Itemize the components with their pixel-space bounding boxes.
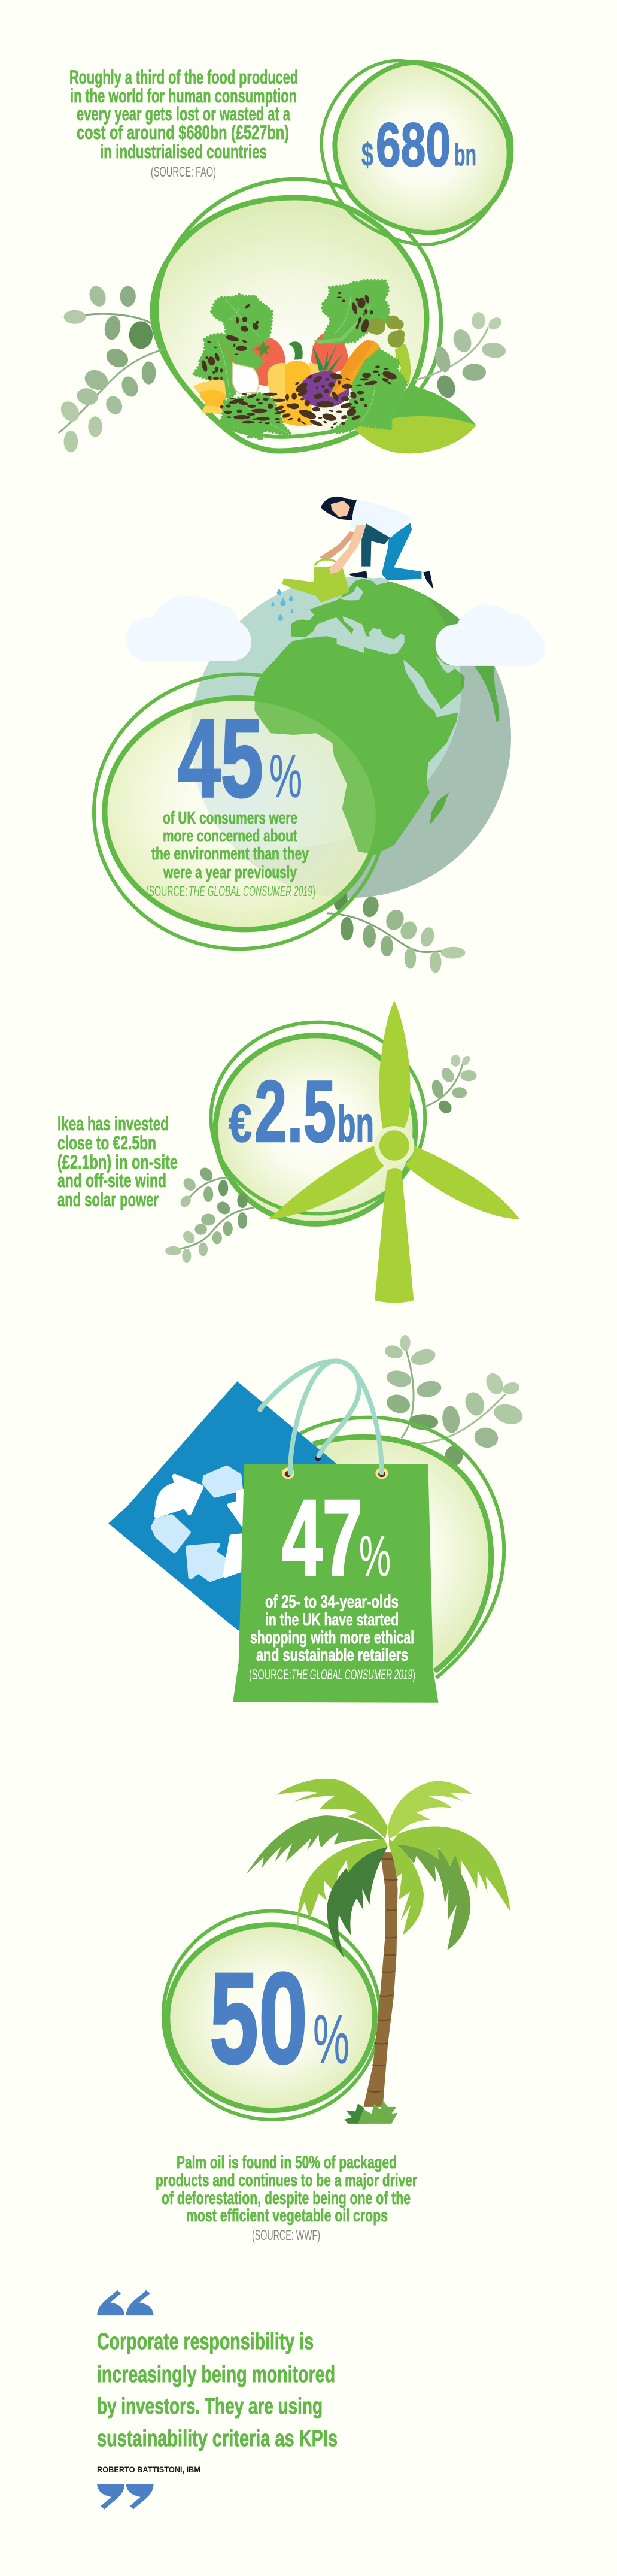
beet (300, 371, 349, 408)
text: UK consumers: were a year previously (163, 863, 297, 882)
cream base (256, 394, 353, 430)
text: Ikea: and solar power (57, 1189, 159, 1210)
intro text: food waste: in industrialised countries (100, 141, 267, 162)
branch: upper left (179, 1167, 229, 1208)
bottom lettuce (220, 349, 407, 439)
branch: top (383, 1335, 443, 1437)
circle: vegetables (153, 179, 441, 451)
beet greens (312, 344, 342, 372)
quote text: increasingly being monitored (97, 2362, 335, 2387)
source: FAO: (SOURCE: FAO) (151, 164, 216, 180)
stat: $680bn: $ (361, 135, 373, 173)
stat: $680bn: 680 (376, 110, 451, 179)
branch: lower left (165, 1193, 253, 1263)
source: The Global Consumer 2019: (SOURCE: (146, 883, 187, 900)
text: palm oil: Palm oil is found in 50% of packaged (177, 2153, 397, 2172)
source: The Global Consumer 2019 (146, 883, 315, 900)
palm artwork (163, 1779, 510, 2124)
land over circle (254, 651, 430, 855)
bag body (233, 1464, 439, 1703)
palm tree (247, 1779, 510, 2124)
onion (217, 335, 235, 362)
brown spoilage spots (200, 292, 398, 429)
carrot (329, 340, 381, 397)
stat: 47%: % (359, 1524, 391, 1588)
text: Ikea: Ikea has invested (57, 1113, 169, 1134)
clouds (126, 595, 546, 666)
text: UK consumers: of UK consumers were (163, 809, 297, 828)
wind turbine (268, 1001, 520, 1303)
source: The Global Consumer 2019: THE GLOBAL CONSUMER 2019 (189, 883, 312, 900)
text: palm oil (156, 2153, 417, 2226)
circle: $680bn (321, 61, 511, 244)
text: palm oil: of deforestation, despite being one of the (162, 2188, 411, 2208)
intro text: food waste: Roughly a third of the food produced (69, 66, 298, 88)
big leaf (352, 385, 476, 453)
recycling tag (108, 1381, 347, 1634)
panel: globe and 45% (81, 497, 546, 973)
text: UK consumers: the environment than they (151, 844, 309, 864)
source: The Global Consumer 2019: ) (312, 883, 315, 900)
quote text: Corporate responsibility is (97, 2329, 314, 2354)
stat: €2.5bn: € (229, 1094, 252, 1153)
text: Ikea (57, 1113, 178, 1210)
branch: upper left (64, 285, 153, 349)
wind artwork (165, 1001, 520, 1303)
panel: quote (97, 2290, 338, 2510)
opening quote mark (97, 2290, 154, 2315)
branch: lower left (58, 346, 163, 452)
panel: food waste (58, 61, 511, 453)
source: WWF: (SOURCE: WWF) (252, 2227, 320, 2244)
broccoli carrot tops (367, 316, 405, 348)
closing quote mark (97, 2484, 154, 2510)
leaves artwork (58, 285, 509, 453)
source: The Global Consumer 2019: ) (412, 1667, 415, 1683)
circle: €2.5bn (211, 1022, 425, 1224)
panel: Ikea wind (57, 1001, 520, 1303)
text: palm oil: most efficient vegetable oil crops (186, 2206, 388, 2226)
stat: €2.5bn: bn (338, 1096, 374, 1152)
stat: 50%: 50 (209, 1945, 308, 2090)
text: Ikea: and off-site wind (57, 1170, 166, 1191)
text: Ikea: (£2.1bn) in on-site (57, 1151, 178, 1173)
globe (190, 577, 511, 898)
intro text: food waste: cost of around $680bn (£527bn) (77, 122, 289, 143)
bag artwork (108, 1335, 526, 1703)
quote text: sustainability criteria as KPIs (97, 2426, 338, 2451)
circle behind bag (290, 1418, 504, 1678)
stat: 45%: % (269, 742, 302, 810)
intro text: food waste: every year gets lost or wasted at a (77, 103, 290, 125)
branch: right (413, 1371, 526, 1469)
stat: €2.5bn: 2.5 (254, 1063, 336, 1160)
stat: 50%: % (313, 2000, 349, 2078)
water drops (271, 588, 294, 621)
pepper (268, 341, 320, 426)
intro text: food waste: in the world for human consumption (70, 85, 297, 107)
text: 25- to 34-year-olds: of 25- to 34-year-olds (265, 1592, 399, 1612)
globe and land (190, 577, 511, 898)
stat: 45%: 45 (178, 697, 263, 821)
intro text: food waste (69, 66, 298, 162)
text: Ikea: close to €2.5bn (57, 1132, 156, 1154)
text: UK consumers (151, 809, 309, 882)
quote attribution: ROBERTO BATTISTONI, IBM (97, 2465, 200, 2474)
text: UK consumers: more concerned about (163, 827, 297, 846)
source: The Global Consumer 2019: THE GLOBAL CONSUMER 2019 (291, 1667, 412, 1683)
source: The Global Consumer 2019: (SOURCE: (249, 1667, 291, 1683)
45% circle (89, 669, 391, 954)
panel: palm oil 50% (156, 1779, 510, 2244)
person watering globe (282, 497, 433, 603)
branch: below globe (327, 889, 466, 973)
stat: 47%: 47 (282, 1478, 363, 1599)
panel: shopping bag 47% (108, 1335, 526, 1703)
tomato stalks (254, 341, 271, 357)
bag handles (257, 1361, 388, 1479)
text: 25- to 34-year-olds: in the UK have started (265, 1610, 399, 1630)
quote text: by investors. They are using (97, 2394, 323, 2419)
seas (291, 578, 460, 717)
squash (193, 380, 226, 414)
stat: $680bn: bn (454, 138, 476, 172)
text: 25- to 34-year-olds: and sustainable retailers (256, 1645, 408, 1665)
lettuce veins (217, 287, 375, 433)
text: 25- to 34-year-olds (250, 1592, 414, 1665)
text: palm oil: products and continues to be a major driver (156, 2171, 417, 2190)
onion bulb (232, 362, 259, 393)
globe artwork (89, 497, 546, 973)
circle: 50% (163, 1911, 380, 2120)
source: The Global Consumer 2019 (249, 1667, 415, 1683)
land masses (254, 577, 499, 855)
vegetables (193, 280, 411, 439)
branch: upper right (425, 1055, 476, 1114)
quote text (97, 2329, 338, 2451)
text: 25- to 34-year-olds: shopping with more ethical (250, 1628, 414, 1648)
branch: right (415, 312, 509, 399)
lettuce (193, 280, 389, 399)
